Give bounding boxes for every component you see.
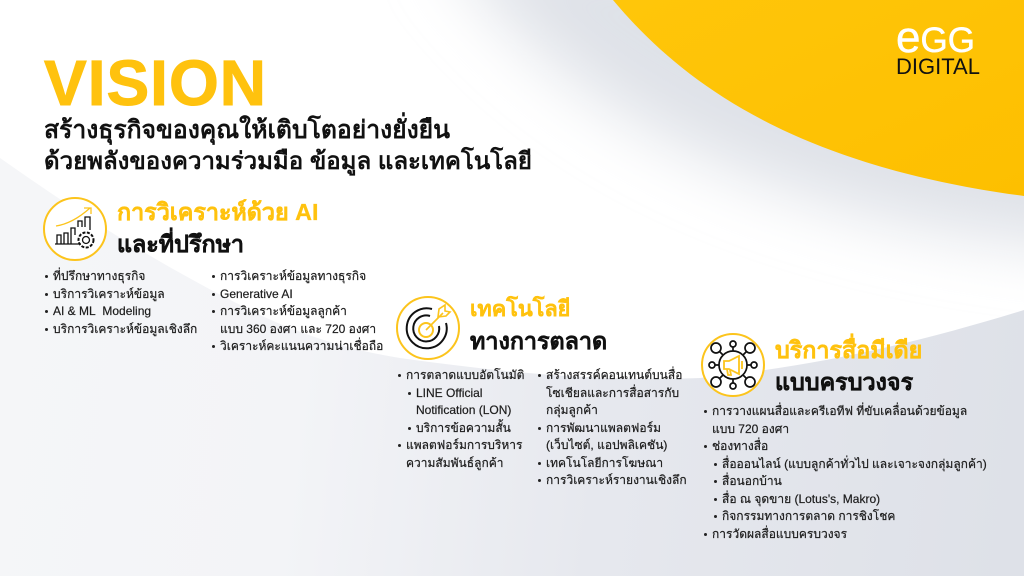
list: right column: การวิเคราะห์ข้อมูลทางธุรกิจ	[220, 269, 366, 283]
list: left column: AI & ML Modeling	[53, 304, 151, 318]
list: left column: บริการวิเคราะห์ข้อมูล	[53, 287, 165, 301]
list: right column: การวิเคราะห์รายงานเชิงลึก	[546, 473, 687, 487]
panel: AI analytics: และที่ปรึกษา	[117, 231, 244, 257]
subtitle: ด้วยพลังของความร่วมมือ ข้อมูล และเทคโนโลยี	[44, 148, 532, 175]
list: right column	[538, 366, 687, 487]
list: การวัดผลสื่อแบบครบวงจร	[712, 527, 847, 541]
list: สื่อนอกบ้าน	[722, 474, 782, 488]
list: left column: Notification (LON)	[416, 403, 511, 417]
list: สื่อ ณ จุดขาย (Lotus's, Makro)	[722, 492, 880, 506]
list: left column: บริการข้อความสั้น	[416, 421, 511, 435]
title: VISION	[44, 47, 267, 119]
list: left column: การตลาดแบบอัตโนมัติ	[406, 368, 524, 382]
list: right column: โซเชียลและการสื่อสารกับ	[546, 386, 679, 400]
list: right column: Generative AI	[220, 287, 293, 301]
logo: EGG Digital: eGG	[896, 13, 975, 62]
logo: EGG Digital: DIGITAL	[896, 54, 980, 79]
panel: media services	[701, 333, 987, 541]
list: right column: กลุ่มลูกค้า	[546, 403, 598, 417]
panel: media services: แบบครบวงจร	[775, 369, 913, 395]
list: left column	[45, 267, 197, 336]
panel: marketing technology	[396, 296, 687, 487]
panel: marketing technology: ทางการตลาด	[470, 328, 607, 354]
list: right column: เทคโนโลยีการโฆษณา	[546, 456, 663, 470]
list: กิจกรรมทางการตลาด การชิงโชค	[722, 509, 895, 523]
list: left column: LINE Official	[416, 386, 482, 400]
list: right column: สร้างสรรค์คอนเทนต์บนสื่อ	[546, 368, 682, 382]
list: right column: (เว็บไซต์, แอปพลิเคชัน)	[546, 438, 667, 452]
heading: เทคโนโลยี	[470, 296, 570, 321]
list: แบบ 720 องศา	[712, 422, 789, 436]
heading: การวิเคราะห์ด้วย AI	[117, 199, 318, 225]
list: การวางแผนสื่อและครีเอทีฟ ที่ขับเคลื่อนด้วยข้อมูล	[712, 404, 967, 418]
list: left column: ความสัมพันธ์ลูกค้า	[406, 456, 503, 470]
icon: chart and gear	[43, 197, 107, 261]
subtitle: สร้างธุรกิจของคุณให้เติบโตอย่างยั่งยืน	[44, 117, 450, 144]
list: right column: แบบ 360 องศา และ 720 องศา	[220, 322, 376, 336]
list: ช่องทางสื่อ	[712, 439, 768, 453]
panel: AI analytics	[43, 197, 383, 353]
list: right column	[212, 269, 383, 353]
list: left column: ที่ปรึกษาทางธุรกิจ	[53, 269, 145, 283]
subtitle	[44, 112, 532, 176]
list: right column: วิเคราะห์คะแนนความน่าเชื่อถือ	[220, 339, 383, 353]
icon: megaphone network	[701, 333, 765, 397]
list	[704, 402, 987, 541]
logo: EGG Digital	[896, 13, 980, 79]
list: right column: การพัฒนาแพลตฟอร์ม	[546, 421, 661, 435]
list: left column: บริการวิเคราะห์ข้อมูลเชิงลึก	[53, 322, 197, 336]
list: right column: การวิเคราะห์ข้อมูลลูกค้า	[220, 304, 347, 318]
list: left column	[398, 368, 524, 470]
list: สื่อออนไลน์ (แบบลูกค้าทั่วไป และเจาะจงกลุ่มลูกค้า)	[722, 457, 987, 471]
list: left column: แพลตฟอร์มการบริหาร	[406, 438, 522, 452]
heading: บริการสื่อมีเดีย	[775, 337, 922, 363]
icon: target	[396, 296, 460, 360]
